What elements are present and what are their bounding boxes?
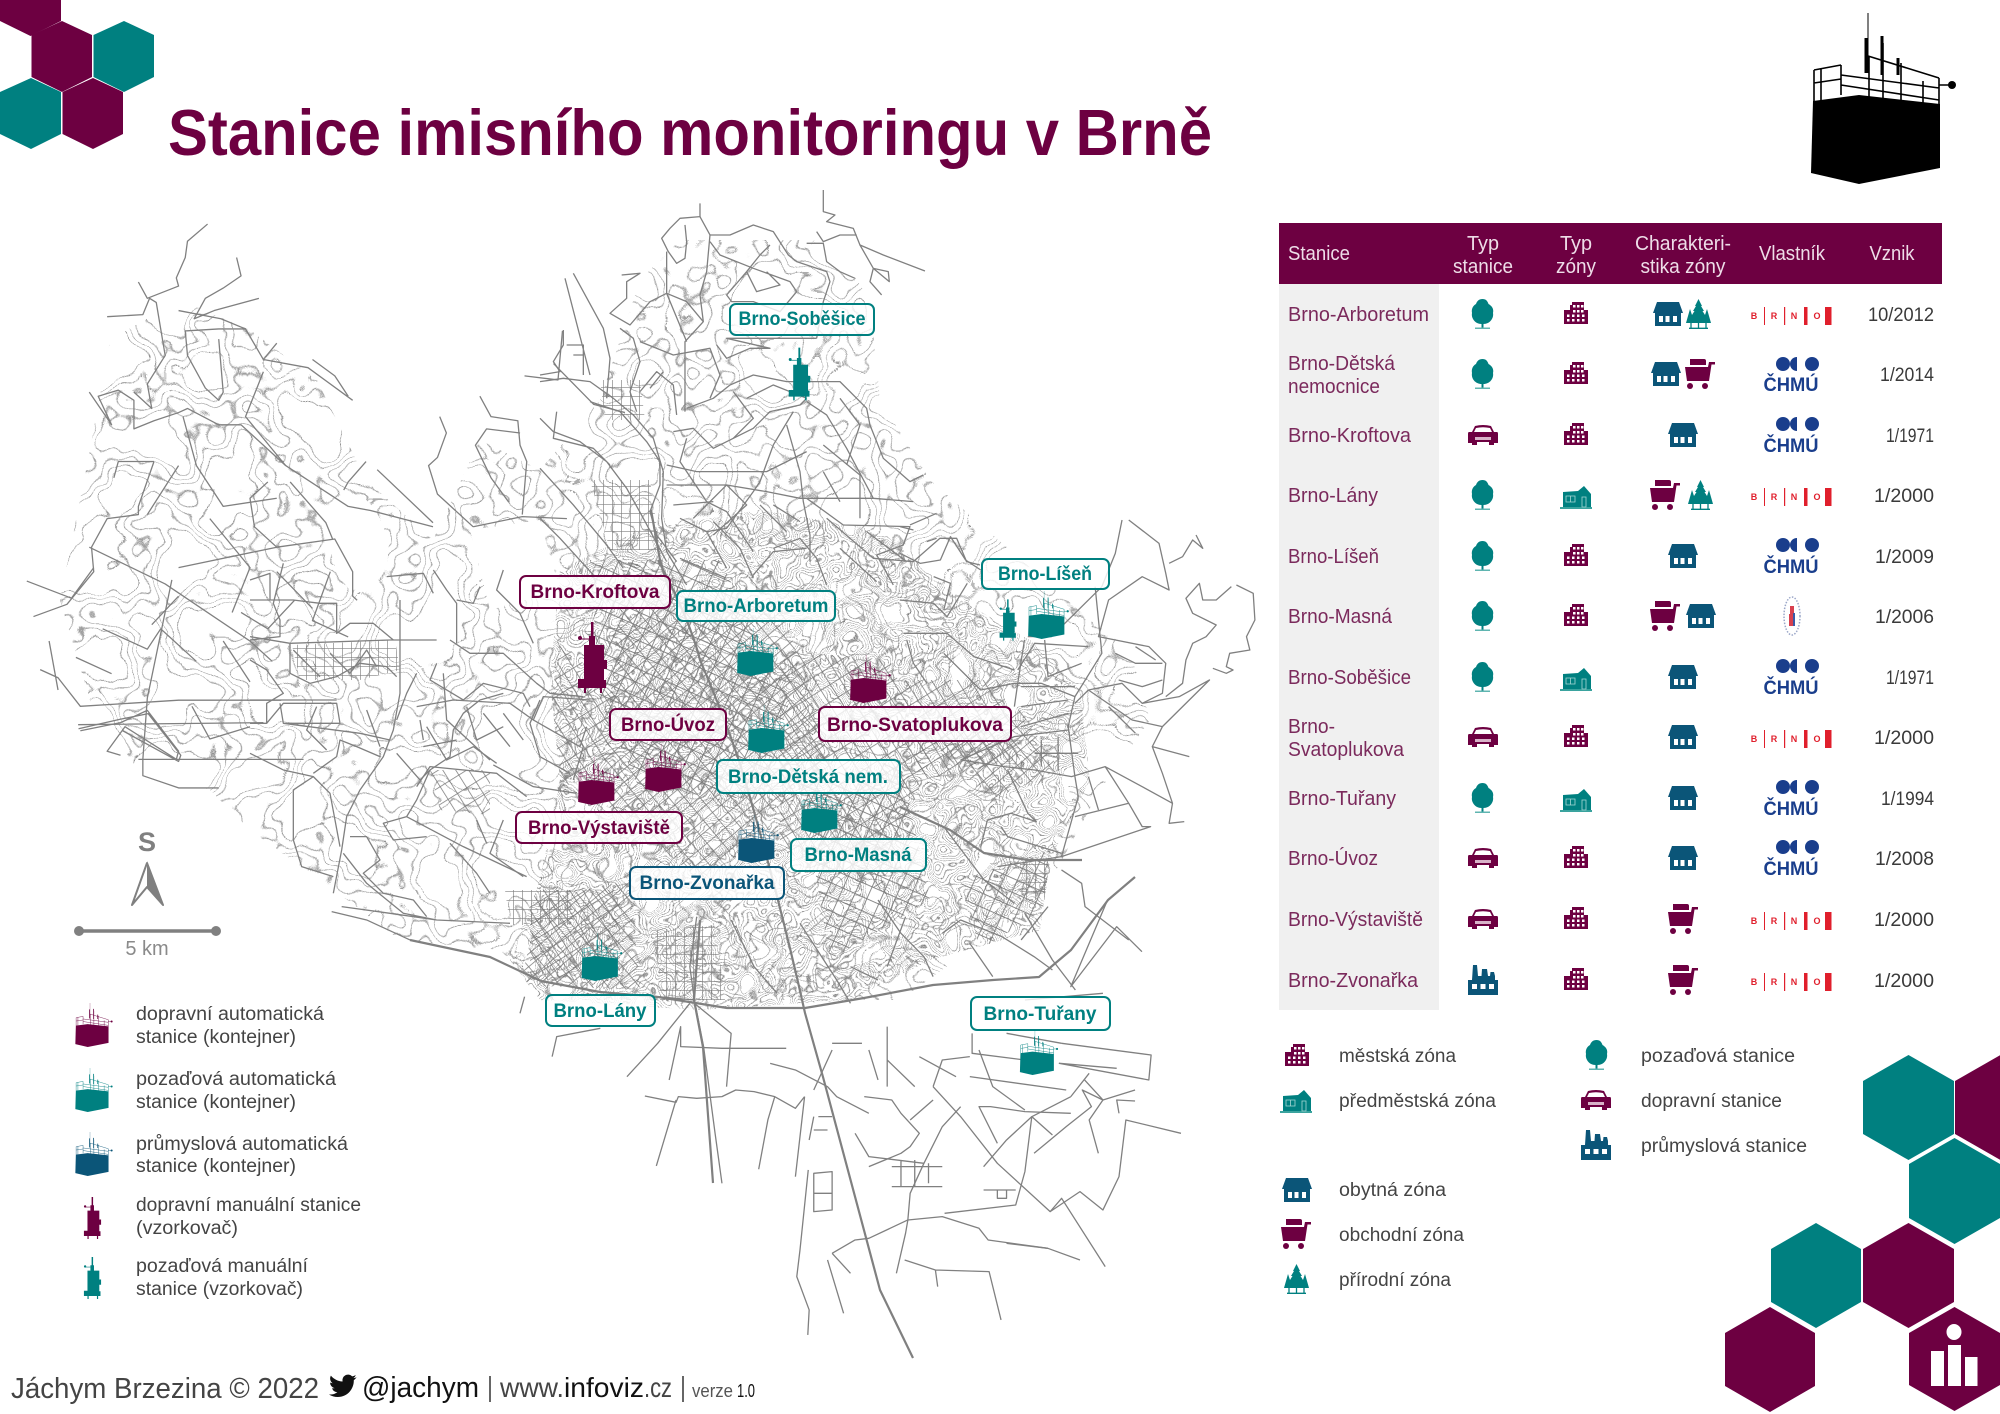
- legend: zones and station types: [1280, 1040, 1807, 1293]
- row: Brno-Výstaviště: R: [1771, 916, 1778, 926]
- row: Brno-Výstaviště: O: [1813, 916, 1821, 926]
- scale bar: [74, 926, 221, 960]
- row: Brno-Dětská nemocnice: 1/2014: [1880, 365, 1934, 386]
- legend item: background manual: stanice (vzorkovač): [136, 1279, 303, 1300]
- label: Brno-Soběšice: [730, 304, 874, 335]
- label: Brno-Výstaviště: Brno-Výstaviště: [528, 818, 670, 839]
- footer credits: [11, 1372, 755, 1405]
- label: Brno-Kroftova: Brno-Kroftova: [530, 582, 660, 603]
- row: Brno-Zvonařka: O: [1813, 977, 1821, 987]
- legend item: traffic automatic: dopravní automatická: [136, 1004, 324, 1025]
- table first column background: [1279, 284, 1439, 1010]
- row: Brno-Dětská nemocnice: Brno-Dětská: [1288, 353, 1396, 375]
- row: Brno-Arboretum: N: [1791, 311, 1797, 321]
- legend: přírodní zóna: [1284, 1264, 1451, 1293]
- table header: stika zóny: [1640, 256, 1726, 278]
- legend: obytná zóna: obytná zóna: [1339, 1180, 1446, 1201]
- row: Brno-Arboretum: B: [1751, 311, 1758, 321]
- legend item: background manual: [84, 1256, 309, 1300]
- label: Brno-Arboretum: [677, 591, 835, 621]
- table header: stanice: [1453, 256, 1513, 278]
- legend item: background automatic: [75, 1068, 336, 1113]
- row: Brno-Svatoplukova: 1/2000: [1874, 728, 1934, 749]
- row: Brno-Masná: [1288, 597, 1934, 635]
- north arrow: S: [138, 827, 156, 857]
- north roads traced: [540, 190, 980, 585]
- row: Brno-Líšeň: 1/2009: [1875, 547, 1934, 568]
- row: Brno-Zvonařka: Brno-Zvonařka: [1288, 970, 1419, 992]
- table header: Vlastník: [1759, 243, 1826, 265]
- footer credits: Jáchym Brzezina © 2022: [11, 1373, 319, 1405]
- row: Brno-Lány: R: [1771, 492, 1778, 502]
- legend item: background automatic: stanice (kontejner): [136, 1092, 296, 1113]
- row: Brno-Arboretum: R: [1771, 311, 1778, 321]
- row: Brno-Dětská nemocnice: ČHMÚ: [1764, 372, 1818, 396]
- row: Brno-Líšeň: ČHMÚ: [1764, 554, 1818, 578]
- table header: Stanice: [1288, 243, 1350, 265]
- label: Brno-Dětská nem.: Brno-Dětská nem.: [728, 767, 888, 788]
- label: Brno-Soběšice: Brno-Soběšice: [738, 309, 866, 330]
- east roads traced: [900, 520, 1255, 940]
- row: Brno-Úvoz: 1/2008: [1875, 849, 1934, 870]
- table header: [1279, 223, 1942, 284]
- legend item: industrial automatic: průmyslová automatická: [136, 1134, 348, 1155]
- icon: infoviz logo: [1931, 1324, 1978, 1386]
- label: Brno-Líšeň: [982, 559, 1109, 589]
- row: Brno-Výstaviště: [1288, 904, 1934, 934]
- legend item: industrial automatic: [75, 1132, 348, 1177]
- label: Brno-Tuřany: [971, 997, 1110, 1030]
- row: Brno-Dětská nemocnice: nemocnice: [1288, 376, 1380, 398]
- legend item: industrial automatic: stanice (kontejner): [136, 1156, 296, 1177]
- row: Brno-Lány: B: [1751, 492, 1758, 502]
- legend item: traffic manual: [84, 1195, 361, 1239]
- legend item: traffic automatic: [75, 1003, 324, 1048]
- label: Brno-Lány: [546, 995, 655, 1026]
- legend: dopravní stanice: dopravní stanice: [1641, 1091, 1782, 1112]
- legend item: traffic automatic: stanice (kontejner): [136, 1027, 296, 1048]
- icon: monitoring station silhouette: [1811, 13, 1956, 184]
- west roads zoomed: [250, 563, 590, 940]
- legend: městská zóna: [1285, 1044, 1456, 1067]
- row: Brno-Zvonařka: [1288, 965, 1934, 995]
- row: Brno-Lány: Brno-Lány: [1288, 485, 1378, 507]
- row: Brno-Dětská nemocnice: [1288, 353, 1934, 398]
- label: Brno-Tuřany: Brno-Tuřany: [984, 1004, 1097, 1025]
- row: Brno-Úvoz: [1288, 840, 1934, 880]
- label: Brno-Úvoz: [610, 709, 726, 740]
- legend: obytná zóna: [1282, 1178, 1446, 1202]
- row: Brno-Soběšice: [1288, 659, 1934, 699]
- row: Brno-Kroftova: ČHMÚ: [1764, 433, 1818, 457]
- row: Brno-Lány: 1/2000: [1874, 486, 1934, 507]
- table header: Typ: [1467, 233, 1499, 255]
- map station markers: [578, 348, 1069, 1075]
- label: Brno-Zvonařka: [630, 867, 784, 899]
- hexagons top left: [0, 0, 154, 149]
- row: Brno-Soběšice: Brno-Soběšice: [1288, 667, 1411, 689]
- row: Brno-Zvonařka: 1/2000: [1874, 971, 1934, 992]
- road network map: [0, 180, 1300, 1380]
- row: Brno-Zvonařka: B: [1751, 977, 1758, 987]
- row: Brno-Tuřany: Brno-Tuřany: [1288, 788, 1396, 810]
- row: Brno-Lány: N: [1791, 492, 1797, 502]
- legend: dopravní stanice: [1581, 1090, 1782, 1112]
- row: Brno-Arboretum: 10/2012: [1868, 305, 1934, 326]
- scale bar: 5 km: [125, 938, 169, 960]
- legend: station types: [75, 1003, 361, 1300]
- footer credits: 1.0: [737, 1381, 755, 1401]
- row: Brno-Kroftova: Brno-Kroftova: [1288, 425, 1412, 447]
- legend item: background automatic: pozaďová automatická: [136, 1069, 336, 1090]
- label: Brno-Výstaviště: [516, 812, 682, 843]
- label: Brno-Svatoplukova: [819, 707, 1011, 741]
- row: Brno-Kroftova: 1/1971: [1886, 426, 1934, 447]
- footer credits: verze: [692, 1381, 733, 1401]
- row: Brno-Výstaviště: N: [1791, 916, 1797, 926]
- table header: Vznik: [1870, 243, 1915, 265]
- row: Brno-Výstaviště: B: [1751, 916, 1758, 926]
- row: Brno-Zvonařka: R: [1771, 977, 1778, 987]
- row: Brno-Tuřany: 1/1994: [1881, 789, 1934, 810]
- row: Brno-Lány: [1288, 480, 1934, 510]
- major roads: [410, 510, 1135, 1358]
- table: [1279, 223, 1942, 1010]
- south roads traced: [520, 900, 1181, 1335]
- label: Brno-Arboretum: Brno-Arboretum: [684, 596, 828, 617]
- row: Brno-Arboretum: O: [1813, 311, 1821, 321]
- row: Brno-Výstaviště: Brno-Výstaviště: [1288, 909, 1423, 931]
- legend: předměstská zóna: [1280, 1090, 1496, 1113]
- table header: Charakteri-: [1635, 233, 1731, 255]
- row: Brno-Svatoplukova: Brno-: [1288, 716, 1335, 738]
- row: Brno-Svatoplukova: O: [1813, 734, 1821, 744]
- row: Brno-Úvoz: Brno-Úvoz: [1288, 847, 1378, 870]
- label: Brno-Svatoplukova: Brno-Svatoplukova: [827, 715, 1003, 736]
- row: Brno-Lány: O: [1813, 492, 1821, 502]
- legend: pozaďová stanice: [1586, 1040, 1795, 1070]
- row: Brno-Masná: Brno-Masná: [1288, 606, 1393, 628]
- label: Brno-Zvonařka: Brno-Zvonařka: [640, 873, 775, 894]
- row: Brno-Kroftova: [1288, 417, 1934, 457]
- row: Brno-Líšeň: [1288, 538, 1934, 578]
- row: Brno-Svatoplukova: Svatoplukova: [1288, 739, 1405, 761]
- table header: zóny: [1556, 256, 1596, 278]
- row: Brno-Svatoplukova: N: [1791, 734, 1797, 744]
- legend: obchodní zóna: [1281, 1219, 1464, 1249]
- label: Brno-Líšeň: Brno-Líšeň: [998, 564, 1092, 585]
- row: Brno-Svatoplukova: B: [1751, 734, 1758, 744]
- row: Brno-Soběšice: 1/1971: [1886, 668, 1934, 689]
- row: Brno-Líšeň: Brno-Líšeň: [1288, 546, 1379, 568]
- label: Brno-Lány: Brno-Lány: [554, 1001, 647, 1022]
- hexagons bottom right: [1725, 1055, 2000, 1412]
- row: Brno-Tuřany: ČHMÚ: [1764, 796, 1818, 820]
- table header: Typ: [1560, 233, 1592, 255]
- row: Brno-Svatoplukova: R: [1771, 734, 1778, 744]
- legend item: traffic manual: (vzorkovač): [136, 1218, 238, 1239]
- legend item: traffic manual: dopravní manuální stanice: [136, 1195, 361, 1216]
- legend: přírodní zóna: přírodní zóna: [1339, 1270, 1451, 1291]
- west roads traced: [27, 224, 625, 788]
- legend: předměstská zóna: předměstská zóna: [1339, 1091, 1496, 1112]
- row: Brno-Zvonařka: N: [1791, 977, 1797, 987]
- row: Brno-Úvoz: ČHMÚ: [1764, 856, 1818, 880]
- north arrow: [132, 827, 164, 906]
- row: Brno-Arboretum: [1288, 299, 1934, 329]
- footer credits: www.: [499, 1372, 564, 1403]
- legend item: background manual: pozaďová manuální: [136, 1256, 309, 1277]
- label: Brno-Masná: Brno-Masná: [804, 845, 912, 866]
- footer credits: infoviz: [564, 1372, 644, 1403]
- footer credits: .cz: [644, 1372, 672, 1403]
- legend: průmyslová stanice: průmyslová stanice: [1641, 1136, 1807, 1157]
- label: Brno-Kroftova: [520, 576, 670, 608]
- row: Brno-Arboretum: Brno-Arboretum: [1288, 304, 1429, 326]
- row: Brno-Svatoplukova: [1288, 716, 1934, 761]
- row: Brno-Masná: 1/2006: [1875, 607, 1934, 628]
- label: Brno-Dětská nem.: [717, 760, 900, 793]
- row: Brno-Soběšice: ČHMÚ: [1764, 675, 1818, 699]
- legend: městská zóna: městská zóna: [1339, 1046, 1456, 1067]
- row: Brno-Tuřany: [1288, 780, 1934, 820]
- legend: pozaďová stanice: pozaďová stanice: [1641, 1046, 1795, 1067]
- title: Stanice imisního monitoringu v Brně: [168, 96, 1212, 169]
- row: Brno-Výstaviště: 1/2000: [1874, 910, 1934, 931]
- legend: průmyslová stanice: [1581, 1130, 1807, 1160]
- label: Brno-Úvoz: Brno-Úvoz: [621, 714, 715, 736]
- label: Brno-Masná: [791, 839, 926, 871]
- legend: obchodní zóna: obchodní zóna: [1339, 1225, 1464, 1246]
- footer credits: @jachym: [362, 1372, 479, 1404]
